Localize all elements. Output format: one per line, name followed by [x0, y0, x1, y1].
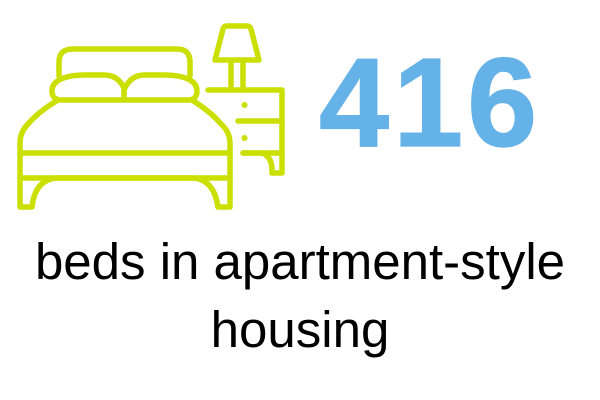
caption: beds in apartment-style housing [35, 233, 565, 358]
icon: bed with nightstand and lamp [17, 23, 285, 210]
number: 416: 416 [319, 32, 541, 173]
caption: beds in apartment-style housing: beds in apartment-style [35, 233, 565, 290]
caption: beds in apartment-style housing: housing [211, 301, 389, 358]
